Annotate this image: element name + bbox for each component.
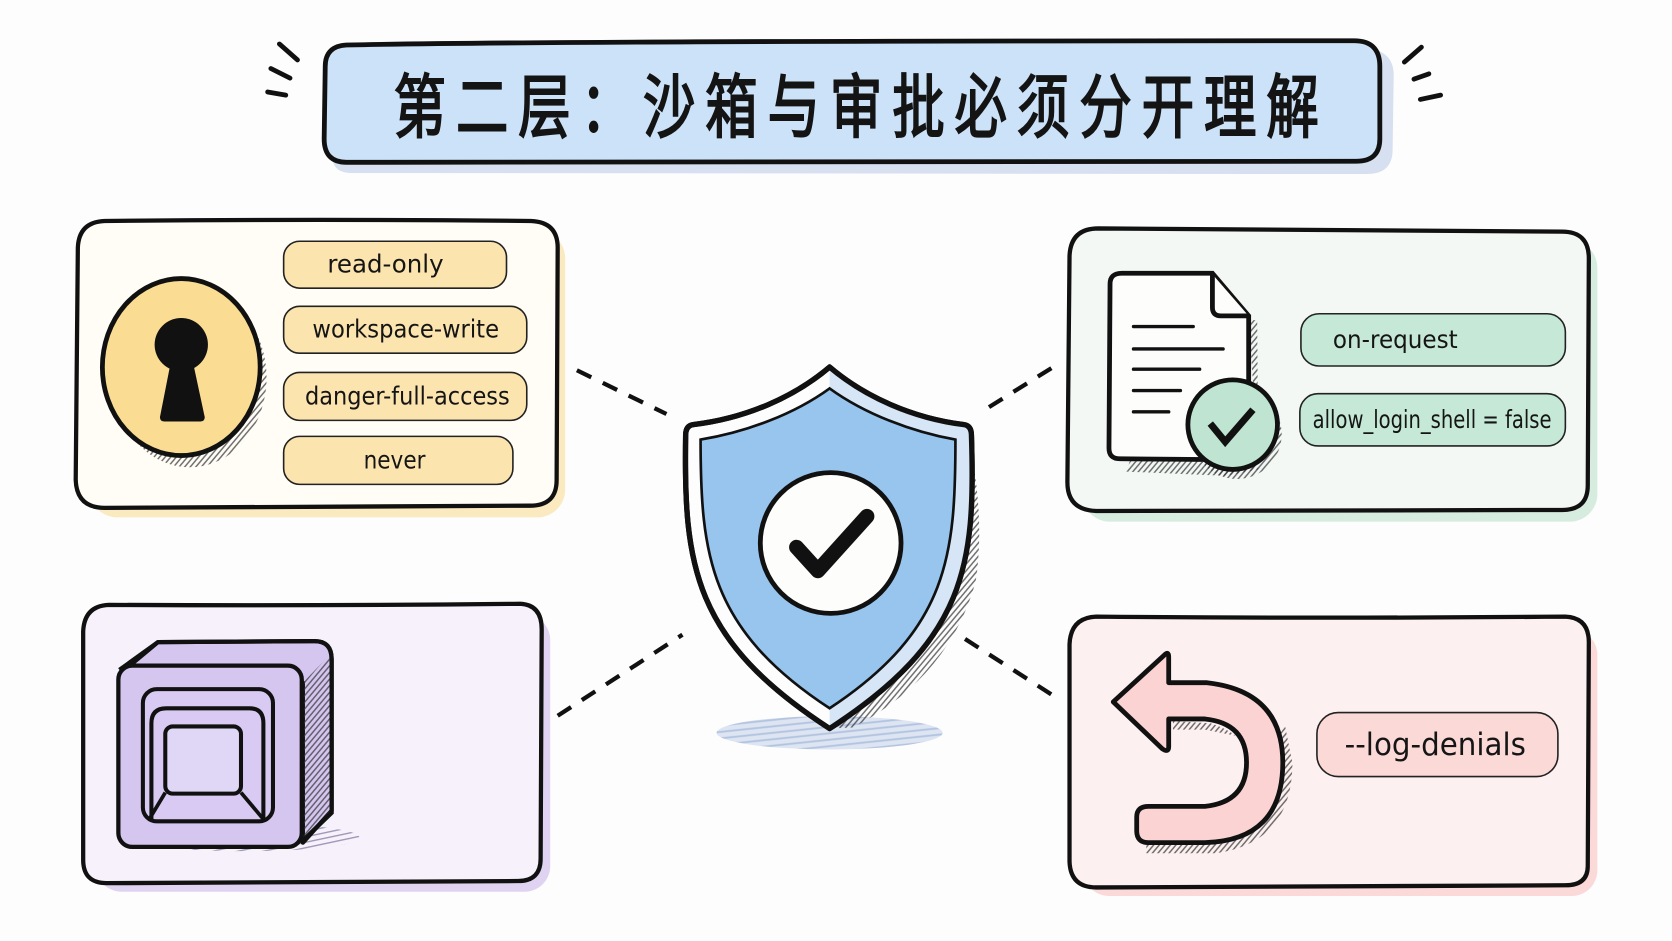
pill: danger-full-access xyxy=(284,372,527,420)
panel: approval policy (green) xyxy=(1067,228,1597,522)
icon: central shield with check xyxy=(685,367,979,749)
pill: read-only xyxy=(284,241,507,288)
icon: keyhole xyxy=(102,279,267,467)
shield ground shadow xyxy=(717,716,943,749)
dashed connector: bottom right xyxy=(965,639,1051,694)
icon: return arrow xyxy=(1113,653,1292,853)
pill: never xyxy=(284,436,513,484)
pill: allow_login_shell = false xyxy=(1300,394,1565,446)
pill: on-request xyxy=(1301,314,1565,366)
pill: workspace-write: workspace-write xyxy=(312,315,499,344)
pill: read-only: read-only xyxy=(327,250,444,279)
title text: 第二层：沙箱与审批必须分开理解 xyxy=(393,69,1329,147)
dashed connector: top right xyxy=(983,368,1051,411)
pill: never: never xyxy=(364,445,426,474)
dashed connector: top left xyxy=(577,370,666,414)
title banner xyxy=(324,41,1394,174)
pill: allow_login_shell = false: allow_login_shell = false xyxy=(1313,405,1552,434)
icon: document with check badge xyxy=(1109,273,1282,479)
right accent ticks xyxy=(1404,47,1441,99)
pill: --log-denials: --log-denials xyxy=(1345,727,1526,763)
panel: log denials (pink) xyxy=(1070,617,1597,896)
left accent ticks xyxy=(268,44,298,95)
panel: sandbox modes (yellow) xyxy=(76,220,565,517)
dashed connector: bottom left xyxy=(558,635,682,716)
pill: danger-full-access: danger-full-access xyxy=(305,381,510,410)
pill: on-request: on-request xyxy=(1333,325,1458,354)
pill: workspace-write xyxy=(284,306,527,353)
pill: --log-denials xyxy=(1317,713,1558,777)
icon: nested box xyxy=(118,641,359,851)
panel: sandbox container (purple) xyxy=(83,604,550,892)
